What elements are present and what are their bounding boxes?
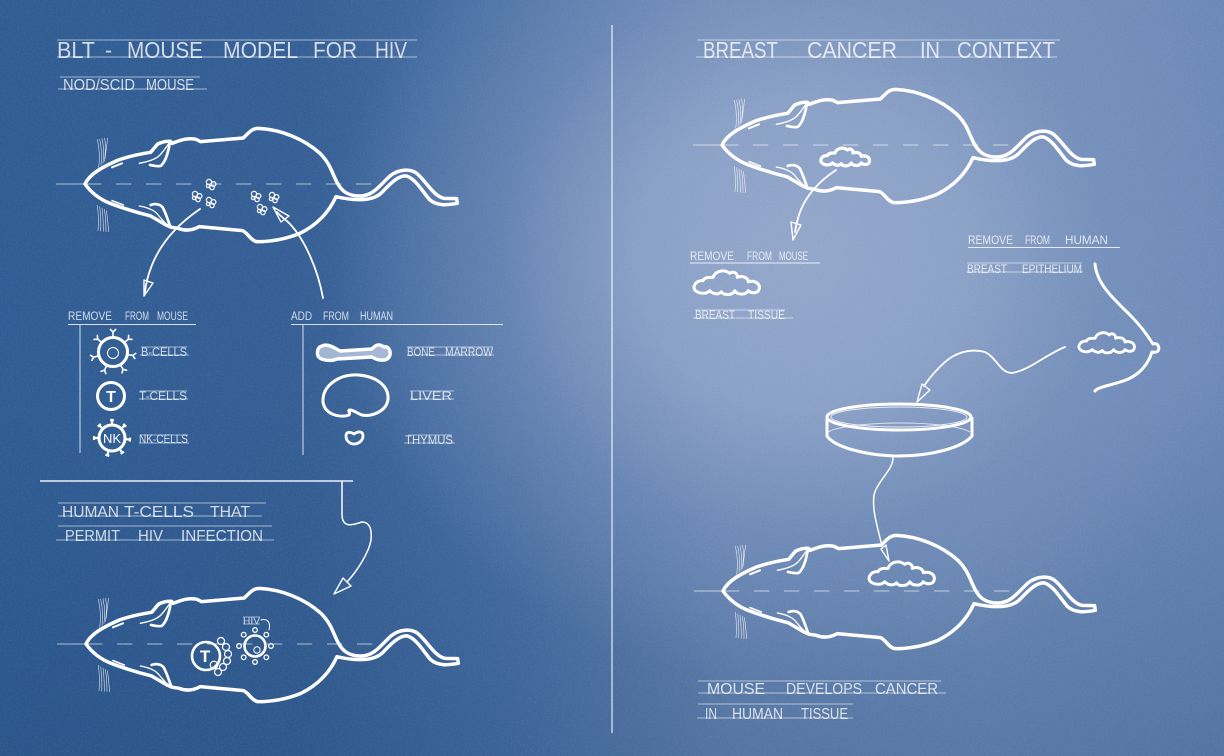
label: bone marrow (407, 347, 494, 359)
heading: remove from mouse: REMOVE (68, 311, 112, 323)
caption: mouse develops cancer in human tissue: MOUSE (707, 681, 765, 698)
icon: bone marrow (317, 345, 390, 360)
label: bone marrow: MARROW (445, 347, 493, 359)
label: breast tissue: TISSUE (748, 310, 785, 322)
icon: NK-cell: NK (103, 431, 121, 446)
label: breast tissue (693, 310, 793, 322)
caption: human T-cells that permit HIV infection: INFECTION (181, 528, 263, 545)
mouse 1: NOD/SCID (56, 128, 457, 242)
title: BLT mouse model: MODEL (223, 37, 298, 63)
heading: add from human (291, 311, 393, 323)
arrow: dish to mouse (874, 458, 893, 561)
label: T-cells: T-CELLS (139, 391, 187, 403)
heading: add from human: HUMAN (360, 311, 393, 323)
icon: tumor in mouse 4 (869, 562, 934, 586)
immune cell clusters in mouse 1 (192, 179, 279, 215)
panel: remove from mouse (breast tissue) (690, 251, 820, 322)
label: breast epithelium: EPITHELIUM (1022, 264, 1082, 276)
label: breast epithelium (967, 263, 1083, 276)
subheading: NOD/SCID mouse: MOUSE (146, 77, 194, 94)
icon: mouse breast tissue (821, 148, 870, 166)
caption: mouse develops cancer in human tissue: DEVELOPS (786, 681, 862, 698)
label: breast tissue: BREAST (695, 310, 735, 322)
subheading: NOD/SCID mouse: NOD/SCID (63, 77, 135, 94)
label: HIV: HIV (243, 616, 260, 626)
heading: HUMAN (1065, 235, 1108, 247)
title: BLT mouse model: HIV (375, 37, 408, 63)
caption: human T-cells that permit HIV infection: HIV (138, 528, 163, 545)
heading: FROM (1025, 235, 1050, 247)
icon: T-cell with budding virus (192, 638, 232, 676)
title: BLT mouse model: MOUSE (127, 37, 203, 63)
heading: add from human: ADD (291, 311, 312, 323)
title: breast cancer in context: BREAST (703, 37, 778, 63)
heading: REMOVE (690, 251, 734, 263)
heading: FROM (747, 251, 772, 263)
mouse 4: develops cancer (694, 535, 1095, 649)
caption: human T-cells that permit HIV infection: THAT (210, 504, 250, 521)
icon: petri dish (827, 404, 972, 456)
heading (968, 235, 1108, 247)
icon: liver (323, 375, 388, 416)
title: breast cancer in context (696, 37, 1060, 63)
caption: mouse develops cancer in human tissue: TISSUE (801, 706, 848, 723)
label: HIV (243, 616, 270, 630)
title: BLT mouse model: BLT (57, 37, 95, 63)
caption: human T-cells that permit HIV infection: PERMIT (65, 528, 120, 545)
title: breast cancer in context: CANCER (807, 37, 897, 63)
heading: add from human: FROM (323, 311, 349, 323)
icon: breast epithelium (1079, 333, 1134, 353)
title: breast cancer in context: CONTEXT (957, 37, 1055, 63)
panel: add from human (291, 311, 503, 455)
label: liver: LIVER (410, 391, 452, 403)
title: BLT mouse model: - (105, 37, 112, 63)
caption: human T-cells that permit HIV infection (56, 503, 274, 545)
panel: remove from mouse (68, 311, 196, 456)
center divider (611, 25, 613, 733)
arrow: remove from mouse (144, 209, 200, 296)
arrow: epithelium to dish (917, 347, 1065, 402)
caption: mouse develops cancer in human tissue: HUMAN (732, 706, 783, 723)
icon: thymus (346, 432, 363, 444)
subheading: NOD/SCID mouse (58, 77, 207, 94)
icon: T-cell with budding virus: T (200, 647, 211, 666)
title: breast cancer in context: IN (920, 37, 940, 63)
heading: REMOVE (968, 235, 1013, 247)
heading: MOUSE (779, 251, 808, 263)
mouse 3: humanized with HIV (57, 588, 458, 702)
panel: remove from human (967, 235, 1120, 276)
icon: breast outline (1095, 264, 1159, 391)
caption: mouse develops cancer in human tissue: CANCER (875, 681, 938, 698)
caption: human T-cells that permit HIV infection: HUMAN (62, 504, 119, 521)
icon: B-cell (90, 329, 136, 374)
heading: remove from mouse (68, 311, 188, 323)
icon: HIV virus (237, 628, 273, 664)
label: NK-cells: NK-CELLS (139, 434, 188, 446)
divider with arrow to mouse 3 (40, 481, 371, 594)
label: bone marrow: BONE (407, 347, 435, 359)
label: breast epithelium: BREAST (967, 264, 1007, 276)
caption: mouse develops cancer in human tissue: IN (705, 706, 717, 723)
label: B-cells: B-CELLS (141, 347, 187, 359)
arrow: add from human (273, 207, 323, 298)
title: BLT mouse model (57, 37, 417, 63)
heading (690, 251, 808, 263)
icon: breast tissue (694, 271, 759, 295)
label: thymus: THYMUS (405, 435, 453, 447)
title: BLT mouse model: FOR (313, 37, 357, 63)
arrow: remove tissue from mouse (791, 170, 836, 240)
caption: human T-cells that permit HIV infection: T-CELLS (124, 504, 194, 521)
caption: mouse develops cancer in human tissue (697, 681, 946, 723)
icon: T-cell (98, 382, 124, 410)
heading: remove from mouse: FROM (125, 311, 149, 323)
mouse 2: remove breast tissue (693, 89, 1094, 203)
icon: NK-cell (94, 420, 130, 456)
icon: T-cell: T (106, 389, 116, 406)
heading: remove from mouse: MOUSE (157, 311, 188, 323)
